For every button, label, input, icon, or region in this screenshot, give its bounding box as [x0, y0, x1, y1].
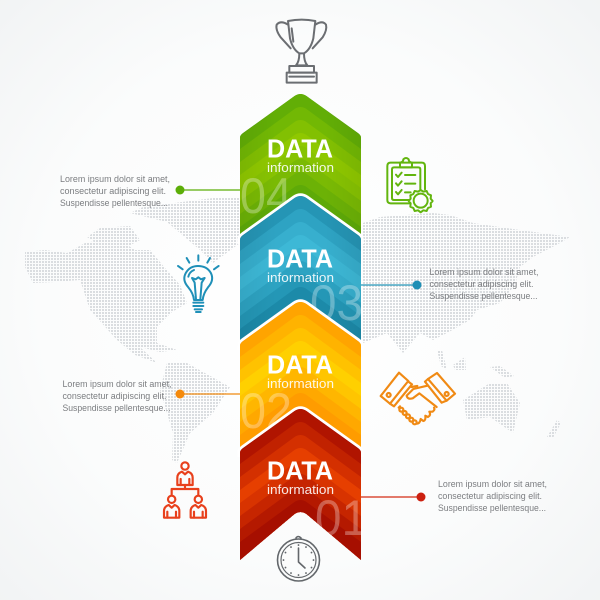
number: 03: 03: [310, 275, 363, 331]
label: data 01: information: [267, 482, 334, 497]
text block: 02: Lorem ipsum dolor sit amet,: [62, 379, 172, 390]
icon: handshake: [381, 373, 455, 424]
arrow: blue 03: [237, 193, 364, 340]
text block: 01: [438, 479, 547, 514]
arrow: green 04: [240, 94, 361, 234]
icon: clipboard: [387, 158, 433, 212]
text block: 04: Lorem ipsum dolor sit amet,: [60, 174, 170, 185]
icon: light bulb: [178, 255, 219, 312]
icon: org chart: [164, 462, 206, 518]
text block: 03: Lorem ipsum dolor sit amet,: [430, 267, 538, 278]
text block: 01: Suspendisse pellentesque...: [438, 503, 546, 514]
arrow: yellow 02: [240, 299, 361, 447]
world map: [25, 198, 570, 463]
text block: 02: [62, 379, 172, 414]
text block: 01: Lorem ipsum dolor sit amet,: [438, 479, 547, 490]
connector: 01: [359, 492, 426, 502]
text block: 04: Suspendisse pellentesque...: [60, 198, 168, 209]
label: data 01: DATA: [267, 456, 333, 486]
text block: 02: consectetur adipiscing elit.: [62, 391, 166, 402]
label: data 04: DATA: [267, 134, 333, 164]
number: 02: 02: [240, 383, 292, 439]
icon: trophy: [276, 20, 326, 83]
connector: 03: [359, 280, 422, 290]
label: data 03: DATA: [267, 244, 333, 274]
icon: stopwatch clock: [278, 536, 320, 581]
connector: 04: [176, 186, 242, 194]
label: data 02: information: [267, 376, 334, 391]
label: data 02: DATA: [267, 350, 333, 380]
arrow: red 01: [240, 406, 361, 560]
text block: 03: Suspendisse pellentesque...: [430, 291, 538, 302]
label: data 04: information: [267, 160, 334, 175]
connector: 02: [176, 390, 242, 398]
text block: 02: Suspendisse pellentesque...: [62, 403, 170, 414]
text block: 01: consectetur adipiscing elit.: [438, 491, 542, 502]
number: 04: 04: [240, 168, 292, 224]
text block: 04: consectetur adipiscing elit.: [60, 186, 166, 197]
text block: 03: [430, 267, 538, 302]
label: data 03: information: [267, 270, 334, 285]
text block: 03: consectetur adipiscing elit.: [430, 279, 534, 290]
text block: 04: [60, 174, 170, 209]
number: 01: 01: [315, 490, 368, 546]
